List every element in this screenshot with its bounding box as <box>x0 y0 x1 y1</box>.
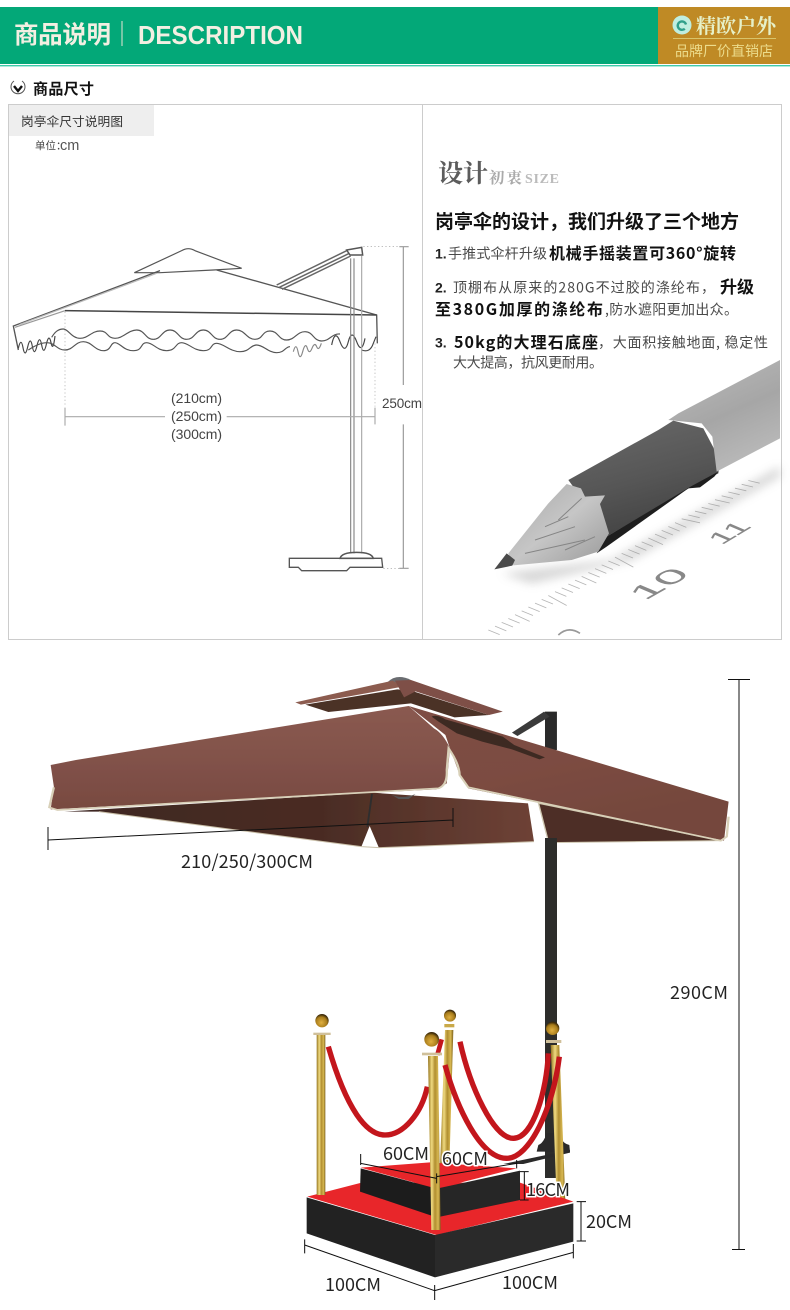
pencil shadow <box>502 467 780 583</box>
rear rope <box>460 1042 548 1138</box>
design title <box>438 160 559 188</box>
section heading: product size <box>11 78 94 99</box>
umbrella pole <box>512 712 557 750</box>
note 2: 升级 <box>720 273 754 298</box>
small plinth right face <box>437 1171 520 1217</box>
base with stanchions <box>305 1010 586 1300</box>
design heading: 岗亭伞的设计，我们升级了三个地方 <box>435 207 739 234</box>
pencil lead point <box>494 553 515 569</box>
right valance <box>539 803 721 843</box>
height dimension line <box>363 247 409 568</box>
note 3: 50kg的大理石底座 <box>454 329 598 353</box>
unit label: cm <box>60 138 79 154</box>
line drawing: umbrella diagram <box>13 247 409 571</box>
note 1: 机械手摇装置可360°旋转 <box>549 240 736 264</box>
header title: English: DESCRIPTION <box>138 20 303 50</box>
note 3: 3. <box>435 334 447 350</box>
diagram width labels: (300cm) <box>171 426 222 442</box>
heading text: 商品尺寸 <box>33 78 94 99</box>
ruler ticks: 11 <box>701 518 758 548</box>
big plinth top <box>307 1183 573 1235</box>
base dimension labels: 16CM <box>526 1176 570 1202</box>
icon: chevron circle <box>11 81 25 94</box>
note 2 <box>435 273 754 320</box>
short rope behind front post <box>437 1039 442 1055</box>
diagram width labels: (250cm) <box>171 408 222 424</box>
umbrella underside <box>64 793 534 848</box>
diagram tab <box>9 105 154 136</box>
pencil dark section <box>568 421 720 537</box>
pencil and ruler image <box>488 360 780 635</box>
umbrella top cap <box>295 677 503 717</box>
note 1: 手推式伞杆升级 <box>448 244 547 264</box>
icon: logo swirl <box>672 16 692 34</box>
header banner <box>0 7 790 66</box>
big plinth left face <box>307 1197 435 1277</box>
total height dimension line <box>728 679 750 1250</box>
unit label <box>35 138 79 154</box>
small plinth left face <box>360 1168 437 1217</box>
big plinth right face <box>435 1203 573 1277</box>
pencil lower edge <box>597 472 718 553</box>
diagram width labels: (210cm) <box>171 390 222 406</box>
ruler numbers: 10 <box>620 564 698 604</box>
diagram width labels <box>171 390 222 442</box>
small plinth top <box>361 1162 517 1189</box>
umbrella photo <box>49 677 729 848</box>
design title: SIZE <box>525 172 559 187</box>
note 2: 2. <box>435 280 447 296</box>
mount plate <box>503 1133 570 1164</box>
right stanchion <box>546 1022 565 1200</box>
lower pole <box>545 838 557 1178</box>
pencil body <box>668 360 780 472</box>
front right canopy panel <box>409 706 729 841</box>
note 2: ,防水遮阳更加出众。 <box>605 300 738 320</box>
front left canopy panel <box>51 706 450 809</box>
note 1 <box>435 240 736 264</box>
canopy width label: 210/250/300CM <box>181 848 313 874</box>
design title: 初衷 <box>489 168 522 187</box>
base dimension labels: 20CM <box>586 1208 632 1234</box>
left rope <box>328 1047 427 1135</box>
canopy vent flap <box>432 716 545 759</box>
pencil wood tip <box>508 484 609 565</box>
panel: size diagram and design notes <box>8 104 782 640</box>
base dimension labels: 60CM <box>442 1145 488 1171</box>
diagram tab: 岗亭伞尺寸说明图 <box>21 111 123 130</box>
note 3: ，大面积接触地面, 稳定性 <box>598 332 768 352</box>
design title: 设计 <box>438 160 488 188</box>
note 2: 至380G加厚的涤纶布 <box>435 296 603 320</box>
logo name: 精欧户外 <box>696 15 778 38</box>
base dimension labels <box>325 1140 632 1297</box>
note 1: 1. <box>435 246 447 262</box>
shop logo block <box>658 7 790 64</box>
logo tagline: 品牌厂价直销店 <box>675 41 773 61</box>
back stanchion <box>440 1010 456 1167</box>
width dimension line <box>65 312 375 426</box>
header divider <box>122 21 123 46</box>
note 3: 大大提高，抗风更耐用。 <box>453 352 603 372</box>
note 2: 顶棚布从原来的280G不过胶的涤纶布， <box>453 278 715 298</box>
hub under canopy <box>390 794 416 799</box>
diagram height label: 250cm <box>382 396 422 411</box>
base dimension lines <box>305 1154 586 1300</box>
front stanchion <box>422 1032 442 1230</box>
left stanchion <box>313 1014 331 1195</box>
unit label: 单位： <box>35 138 66 153</box>
total height label: 290CM <box>670 979 728 1005</box>
canopy width dimension line <box>48 808 453 850</box>
header title: Chinese: 商品说明 <box>14 16 111 51</box>
note 3 <box>435 329 768 372</box>
base dimension labels: 60CM <box>383 1140 429 1166</box>
base dimension labels: 100CM <box>325 1271 381 1297</box>
ruler ticks <box>488 480 760 635</box>
base dimension labels: 100CM <box>502 1269 558 1295</box>
canopy trim <box>49 748 729 841</box>
front rope <box>445 1057 559 1158</box>
